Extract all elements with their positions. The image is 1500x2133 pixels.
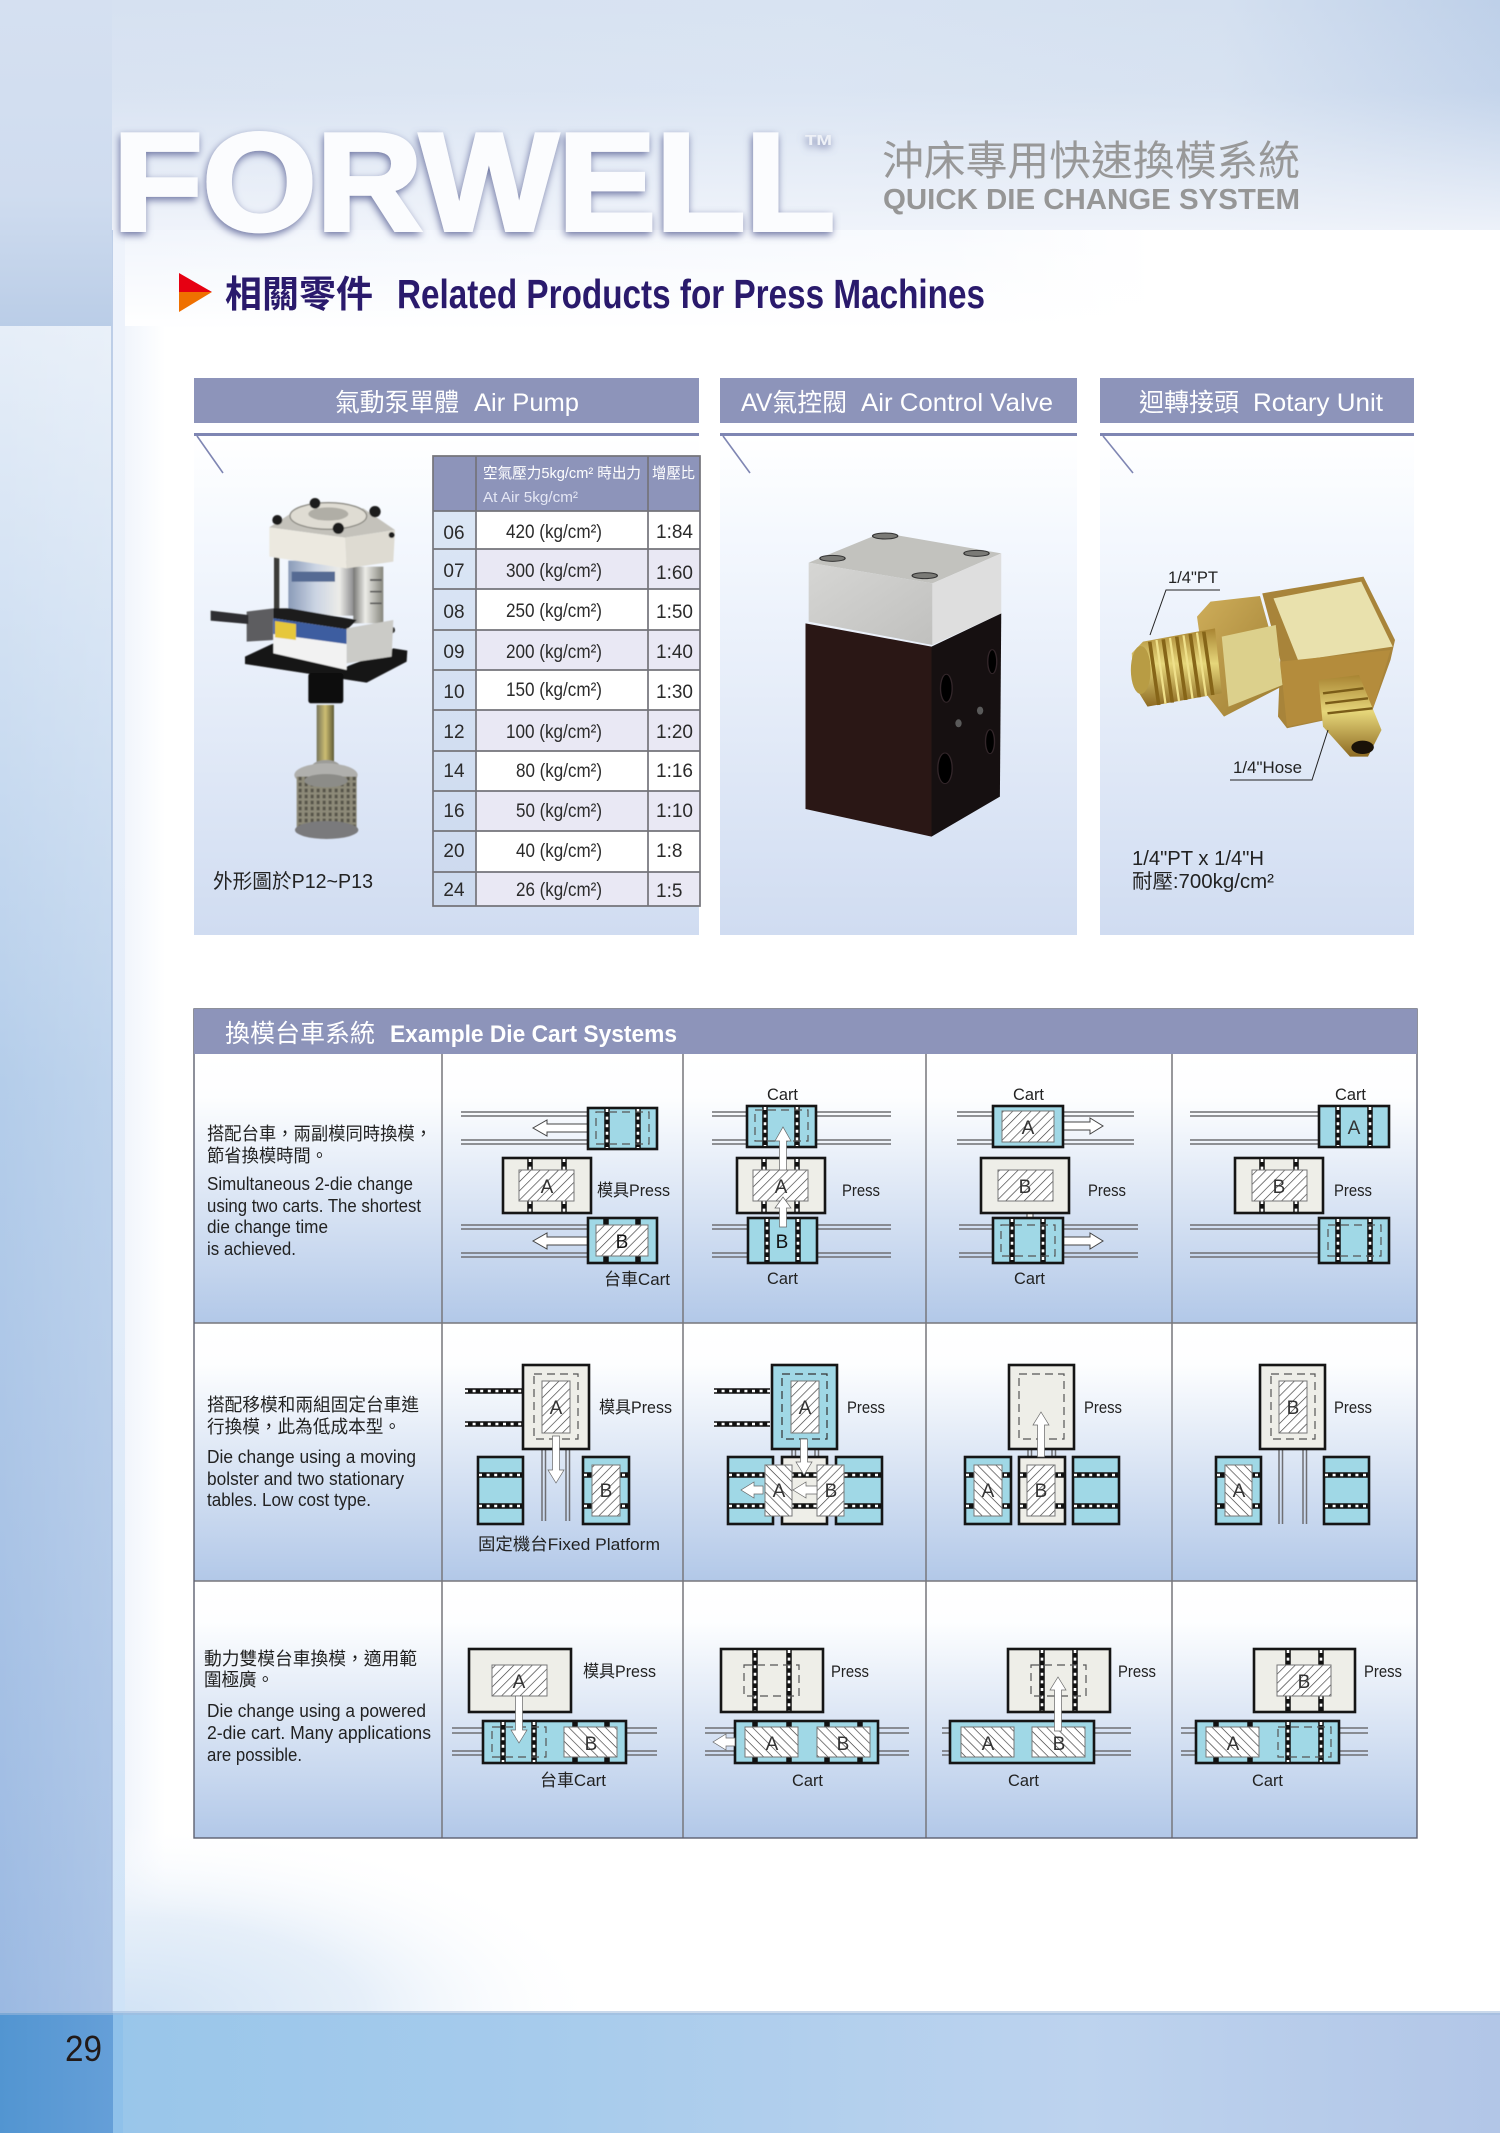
diagram: row 3 step 2: A (766, 1734, 779, 1755)
diagram: row 3 step 1: 模具Press (583, 1662, 656, 1681)
diagram: row 3 step 1: 台車Cart (540, 1771, 606, 1790)
diagram: row 2 step 4: Press (1334, 1398, 1372, 1417)
diagram: row 1 step 4: B (1273, 1177, 1285, 1198)
diagram: row 3 step 4 (1181, 1649, 1402, 1790)
diagram: row 3 step 2 (705, 1649, 909, 1790)
diagram: row 2 step 4: A (1233, 1481, 1246, 1502)
diagram: row 3 step 2: B (837, 1734, 849, 1755)
table: pressure ratios: 空氣壓力5kg/cm² 時出力 (483, 465, 641, 482)
diagram: row 2 step 4 (1216, 1365, 1372, 1524)
diagram: row 2 step 1: A (550, 1398, 563, 1419)
caption: outline page reference: 外形圖於P12~P13 (213, 870, 373, 893)
tagline (882, 138, 1300, 216)
diagram: row 2 step 2: B (825, 1481, 837, 1502)
table: pressure ratios: 1:8 (656, 841, 682, 862)
diagram: row 1 step 4: Press (1334, 1181, 1372, 1200)
diagram: row 2 step 2: A (773, 1481, 786, 1502)
tagline: QUICK DIE CHANGE SYSTEM (883, 184, 1300, 216)
callout: 1/4"PT (1150, 568, 1220, 635)
diagram: row 2 step 1 (465, 1365, 672, 1554)
text: row 1 description: 搭配台車，兩副模同時換模， (207, 1124, 432, 1144)
diagram: row 1 step 2: A (775, 1177, 788, 1198)
diagram: row 2 step 2 (714, 1365, 885, 1524)
header: air pump (194, 378, 699, 423)
diagram: row 1 step 3: Cart (1013, 1085, 1044, 1104)
diagram: row 1 step 3: Cart (1014, 1269, 1045, 1288)
diagram: row 3 step 2: Cart (792, 1771, 823, 1790)
text: row 3 description: 動力雙模台車換模，適用範 (204, 1649, 417, 1669)
table: pressure ratios: 1:30 (656, 682, 693, 703)
header: air control valve (720, 378, 1077, 423)
table: pressure ratios: 1:5 (656, 881, 682, 902)
diagram: row 1 step 3: Press (1088, 1181, 1126, 1200)
table: pressure ratios: 1:10 (656, 801, 693, 822)
table: pressure ratios: 300 (kg/cm²) (506, 561, 602, 582)
header: die cart systems: 換模台車系統 (225, 1020, 375, 1048)
header: rotary unit: Rotary Unit (1253, 389, 1383, 417)
text: row 3 description: Die change using a powered (207, 1701, 426, 1721)
table: pressure ratios: 26 (kg/cm²) (516, 880, 602, 901)
diagram: row 2 step 1: 固定機台Fixed Platform (478, 1535, 660, 1554)
callout: 1/4"Hose (1230, 730, 1328, 780)
text: row 1 description: die change time (207, 1217, 328, 1237)
diagram: row 2 step 2: A (799, 1398, 812, 1419)
table: pressure ratios: 250 (kg/cm²) (506, 601, 602, 622)
header: air control valve: Air Control Valve (861, 389, 1053, 417)
icon: red orange triangle (179, 273, 212, 312)
table: pressure ratios: 1:20 (656, 722, 693, 743)
table: pressure ratios: At Air 5kg/cm² (483, 489, 578, 506)
table: pressure ratios (433, 456, 700, 906)
text: row 2 description: bolster and two stationary (207, 1469, 404, 1489)
text: row 2 description: Die change using a moving (207, 1447, 416, 1467)
diagram: row 3 step 1: B (585, 1734, 597, 1755)
header: air pump: Air Pump (474, 389, 579, 417)
diagram: row 1 step 1: 台車Cart (604, 1270, 670, 1289)
header: rotary unit (1100, 378, 1414, 423)
text: row 1 description: using two carts. The shortest (207, 1196, 421, 1216)
diagram: row 1 step 2: Cart (767, 1269, 798, 1288)
diagram: row 3 step 1 (452, 1649, 657, 1790)
text: row 1 description: Simultaneous 2-die change (207, 1174, 413, 1194)
text: specification: 1/4"PT x 1/4"H (1132, 848, 1264, 870)
panel: air pump (194, 378, 700, 935)
diagram: row 2 step 2: Press (847, 1398, 885, 1417)
logo: FORWELL: FORWELL (113, 105, 835, 260)
text: row 3 description: 2-die cart. Many applications (207, 1723, 431, 1743)
text: row 3 description: 圍極廣。 (204, 1670, 274, 1690)
table: pressure ratios: 16 (443, 801, 465, 822)
diagram: row 2 step 3: A (982, 1481, 995, 1502)
section title: Related Products for Press Machines (397, 271, 985, 317)
table: pressure ratios: 40 (kg/cm²) (516, 841, 602, 862)
diagram: row 3 step 3: B (1053, 1734, 1065, 1755)
section title (179, 271, 985, 317)
diagram: row 1 step 2: B (776, 1232, 788, 1253)
diagram: row 1 step 2: Cart (767, 1085, 798, 1104)
header: rotary unit: 迴轉接頭 (1139, 389, 1239, 417)
table: pressure ratios: 20 (443, 841, 465, 862)
text: specification: 耐壓:700kg/cm² (1132, 870, 1274, 893)
text: row 1 description (207, 1124, 432, 1259)
diagram: row 2 step 3: B (1035, 1481, 1047, 1502)
table: pressure ratios: 1:50 (656, 602, 693, 623)
table: pressure ratios: 50 (kg/cm²) (516, 801, 602, 822)
text: specification (1132, 848, 1274, 893)
diagram: row 1 step 4 (1190, 1085, 1389, 1263)
diagram: row 2 step 1: B (600, 1481, 612, 1502)
diagram: row 3 step 4: Press (1364, 1662, 1402, 1681)
text: row 2 description: 搭配移模和兩組固定台車進 (207, 1395, 419, 1415)
diagram: row 1 step 4: Cart (1335, 1085, 1366, 1104)
table: pressure ratios: 07 (443, 561, 465, 582)
diagram: row 1 step 1: A (541, 1177, 554, 1198)
header: die cart systems: Example Die Cart Systems (390, 1021, 677, 1048)
diagram: row 1 step 1: B (616, 1232, 628, 1253)
table: pressure ratios: 06 (443, 523, 465, 544)
diagram: row 1 step 1: 模具Press (597, 1181, 670, 1200)
text: row 1 description: is achieved. (207, 1239, 296, 1259)
diagram: row 1 step 3 (957, 1085, 1138, 1288)
diagram: row 3 step 3 (942, 1649, 1156, 1790)
table: pressure ratios: 1:16 (656, 761, 693, 782)
table: pressure ratios: 09 (443, 642, 465, 663)
diagram: row 3 step 4: Cart (1252, 1771, 1283, 1790)
diagram: row 2 step 4: B (1287, 1398, 1299, 1419)
diagram: row 3 step 3: Press (1118, 1662, 1156, 1681)
logo: FORWELL: TM (805, 132, 832, 149)
diagram: row 1 step 2: Press (842, 1181, 880, 1200)
photo: brass fitting (1131, 577, 1395, 757)
diagram: row 1 step 3: B (1019, 1177, 1031, 1198)
table: pressure ratios: 150 (kg/cm²) (506, 680, 602, 701)
table: pressure ratios: 1:40 (656, 642, 693, 663)
header: air pump: 氣動泵單體 (335, 389, 459, 417)
diagram: row 2 step 1: 模具Press (599, 1398, 672, 1417)
diagram: row 3 step 1: A (513, 1672, 526, 1693)
diagram: row 1 step 2 (712, 1085, 891, 1288)
diagram: row 1 step 3: A (1022, 1118, 1035, 1139)
diagram: row 3 step 3: Cart (1008, 1771, 1039, 1790)
table: pressure ratios: 12 (443, 722, 465, 743)
table: pressure ratios: 24 (443, 880, 465, 901)
diagram: row 1 step 4: A (1348, 1118, 1361, 1139)
text: row 3 description: are possible. (207, 1745, 302, 1765)
table: pressure ratios: 1:60 (656, 563, 693, 584)
panel: rotary unit (1100, 378, 1414, 935)
table: pressure ratios: 08 (443, 602, 465, 623)
table: pressure ratios: 14 (443, 761, 465, 782)
diagram: row 2 step 3: Press (1084, 1398, 1122, 1417)
page number: 29 (65, 2028, 102, 2069)
photo: air pump (211, 498, 407, 839)
diagram: row 3 step 3: A (982, 1734, 995, 1755)
text: row 2 description: 行換模，此為低成本型。 (207, 1417, 401, 1437)
text: row 1 description: 節省換模時間。 (207, 1146, 328, 1166)
diagram: row 3 step 4: B (1298, 1672, 1310, 1693)
text: row 2 description (207, 1395, 419, 1510)
table: pressure ratios: 200 (kg/cm²) (506, 642, 602, 663)
table: pressure ratios: 10 (443, 682, 465, 703)
table: pressure ratios: 80 (kg/cm²) (516, 761, 602, 782)
photo: valve (806, 533, 1001, 837)
diagram: row 3 step 2: Press (831, 1662, 869, 1681)
diagram: row 3 step 4: A (1227, 1734, 1240, 1755)
panel: die cart systems (194, 1009, 1417, 1838)
callout: 1/4"Hose: 1/4"Hose (1233, 758, 1302, 777)
header: die cart systems (194, 1009, 1417, 1054)
section title: 相關零件 (225, 274, 373, 315)
header: air control valve: AV氣控閥 (741, 389, 847, 417)
tagline: 沖床專用快速換模系統 (882, 138, 1300, 184)
text: row 2 description: tables. Low cost type. (207, 1490, 371, 1510)
diagram: row 1 step 1 (461, 1108, 670, 1289)
diagram: row 2 step 3 (965, 1365, 1122, 1524)
table: pressure ratios: 增壓比 (652, 465, 695, 482)
callout: 1/4"PT: 1/4"PT (1168, 568, 1218, 587)
table: pressure ratios: 100 (kg/cm²) (506, 722, 602, 743)
panel: air control valve (720, 378, 1077, 935)
text: row 3 description (204, 1649, 431, 1765)
table: pressure ratios: 1:84 (656, 522, 693, 543)
table: pressure ratios: 420 (kg/cm²) (506, 522, 602, 543)
